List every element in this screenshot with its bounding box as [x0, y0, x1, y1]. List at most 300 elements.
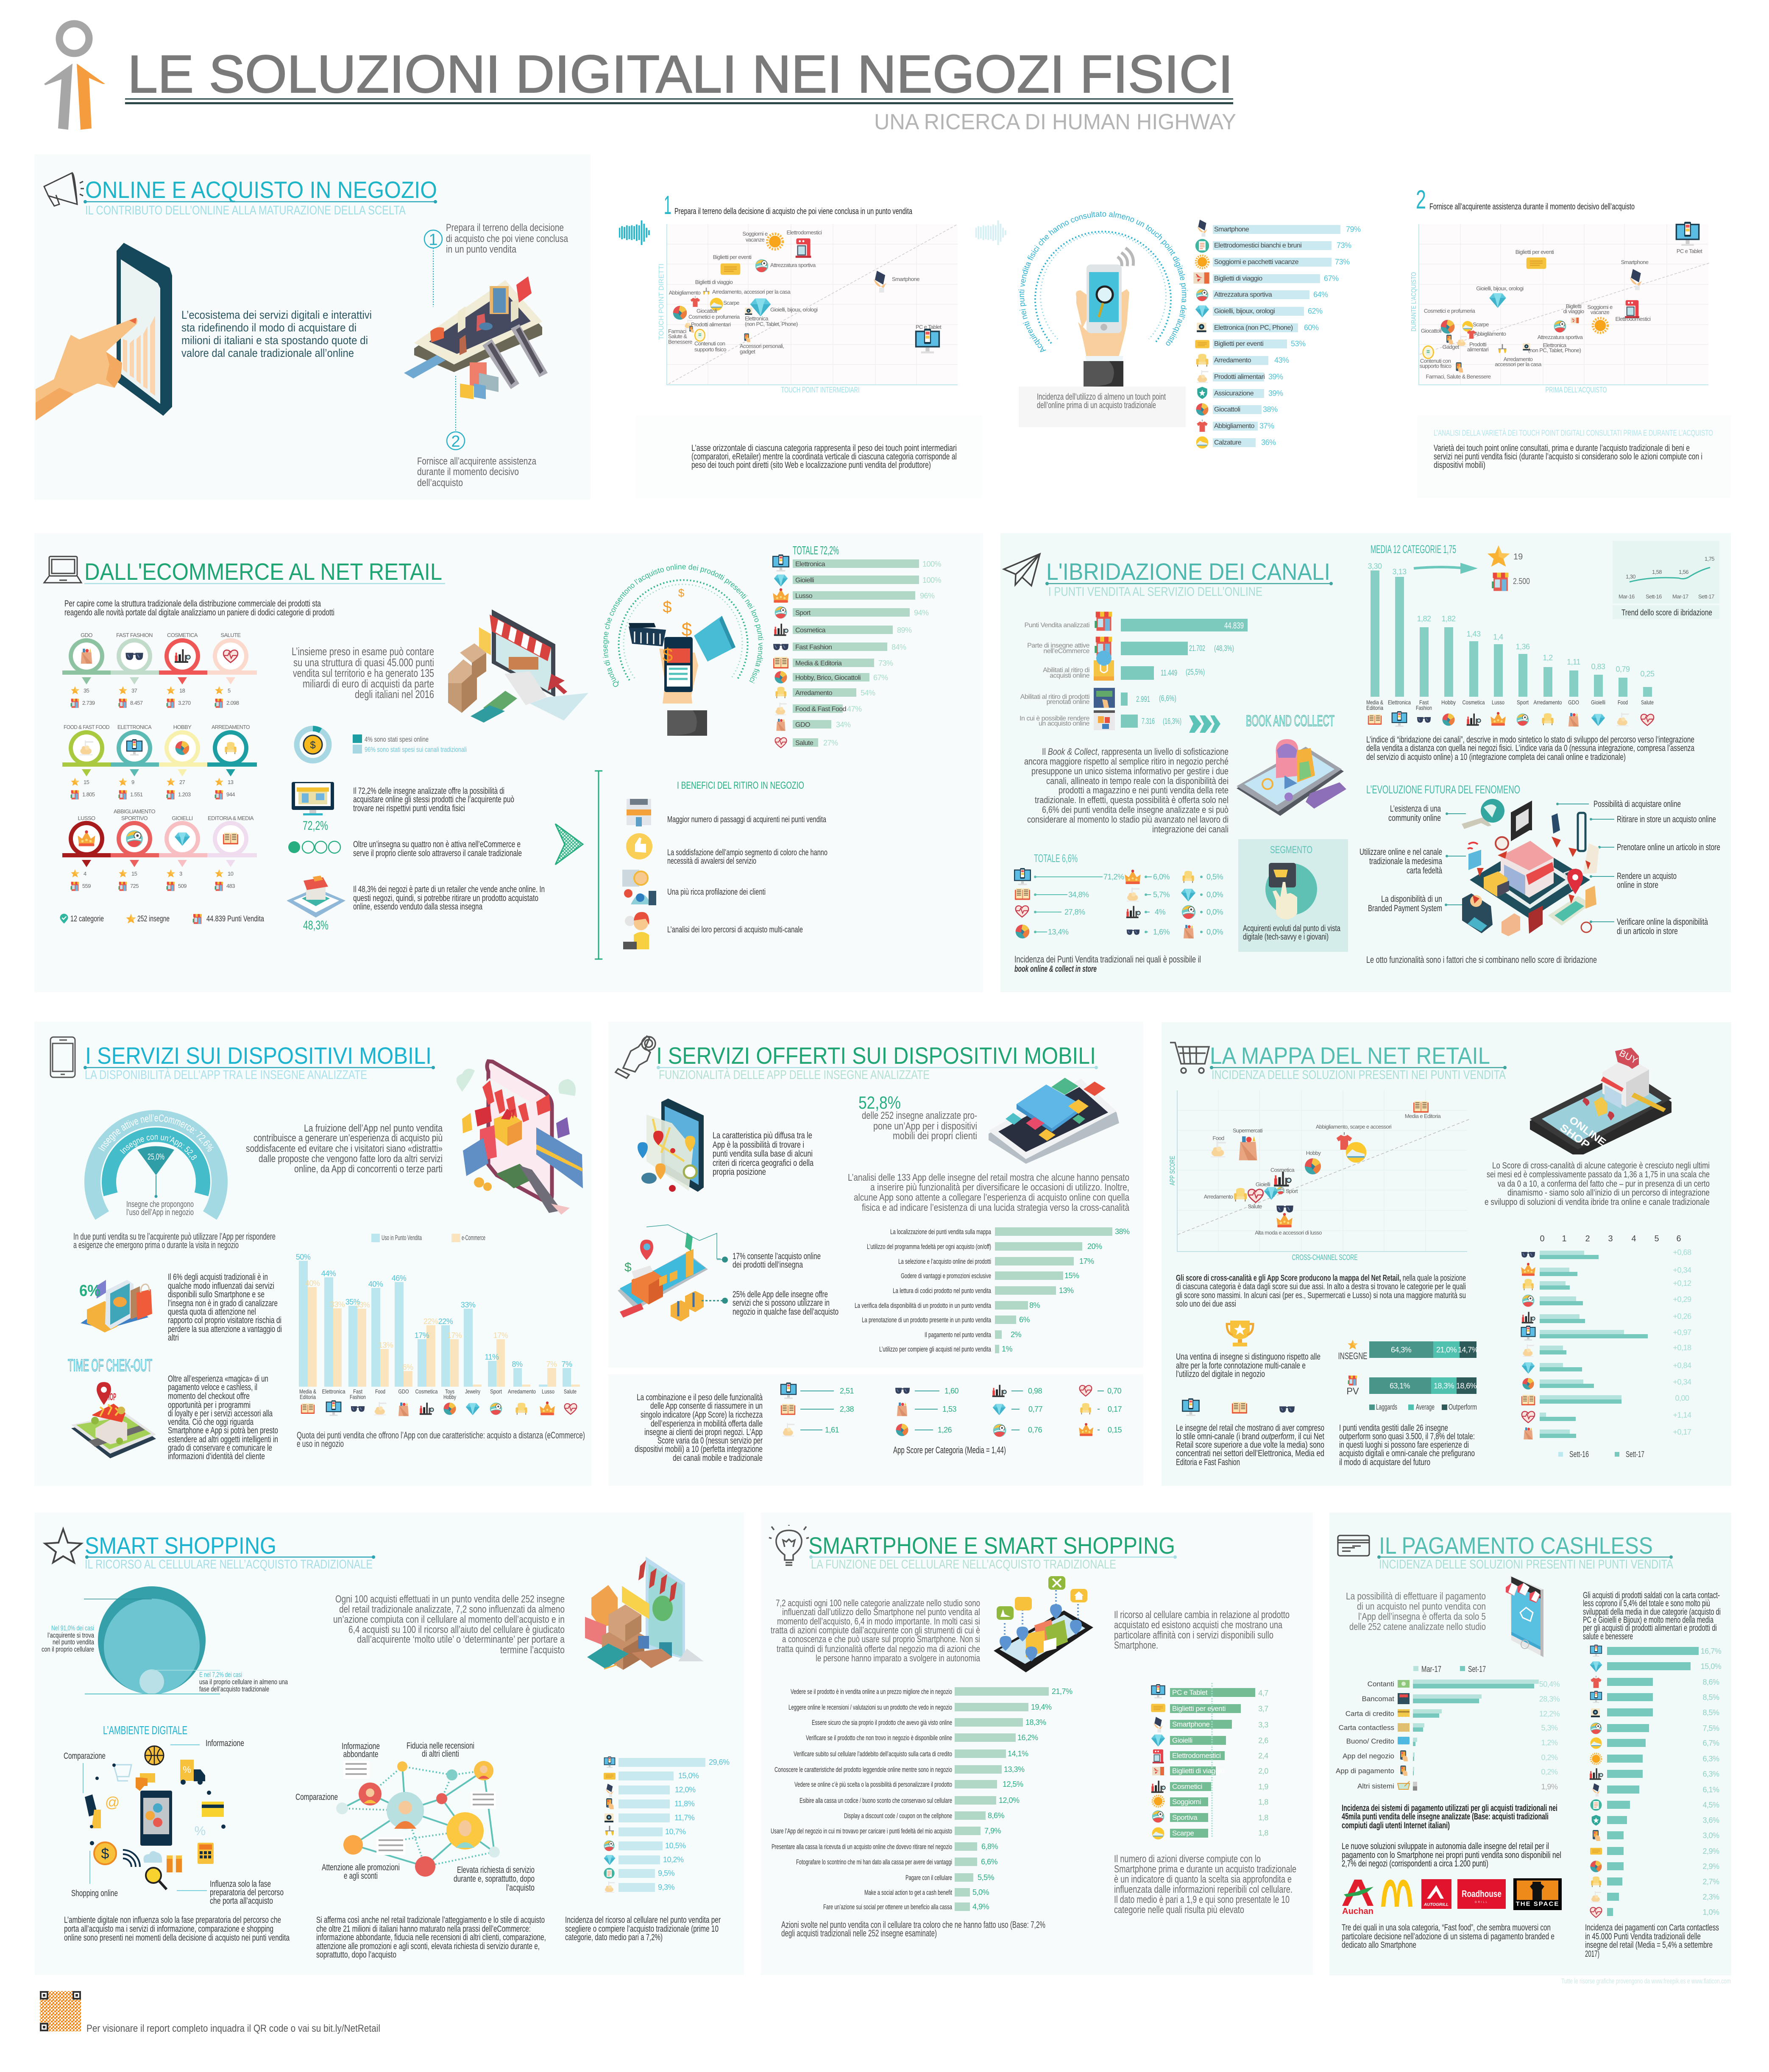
bar chart: sett-16 vs sett-17: 4: [1631, 1234, 1636, 1243]
text: 6% degli acquisti: qualche modo influenzati dai servizi: [168, 1281, 274, 1291]
bar chart: azioni con il cellulare: 12,5%: [1003, 1780, 1023, 1788]
bar chart: azioni per categoria: 1,9: [1258, 1783, 1268, 1791]
stat: 48,3%: questi negozi, quindi, si potrebbe ritirare un prodotto acquistato: [353, 893, 538, 903]
grouped bar chart: app uso e ecommerce: Hobby: [443, 1393, 456, 1400]
nested circles chart: [42, 1586, 288, 1694]
text: carta contactless: per gli acquisti di prodotti alimentari e prodotti di: [1583, 1623, 1717, 1633]
gauge chart: l’uso dell’App in negozio: [126, 1208, 194, 1217]
stat: 48,3%: online, essendo venduto dalla stessa insegna: [353, 902, 482, 912]
column chart: hybrid score: MEDIA 12 CATEGORIE 1,75: [1371, 543, 1456, 556]
chart: app score per categoria: 1,53: [942, 1405, 957, 1413]
chart: app score per categoria: [780, 1382, 1122, 1455]
illustration: hand with phone, basket, bag: $: [663, 645, 673, 665]
scatter chart 2: supporto fisico: [1420, 363, 1451, 369]
bar chart: sett-16 vs sett-17: +0,12: [1673, 1279, 1691, 1288]
bar chart: sett-16 vs sett-17: 1: [1562, 1234, 1567, 1243]
column chart: hybrid score: Media &: [1366, 699, 1384, 706]
stat: 52,8%: [858, 1093, 977, 1142]
trend box: 1,56: [1679, 569, 1688, 575]
bar chart: azioni con il cellulare: 16,2%: [1017, 1733, 1038, 1742]
subheading: LA DISPONIBILITÀ DELL’APP TRA LE INSEGNE ANALIZZATE: [85, 1068, 367, 1082]
text: una ventina: altre per la forte connotazione multi-canale e: [1176, 1361, 1306, 1371]
stat: 48,3%: [287, 876, 545, 932]
box: segmento: Acquirenti evoluti dal punto di vista: [1243, 924, 1341, 933]
text: analysis of touch point variety: Varietà dei touch point online consultati, prima e durante l’acquisto tradizionale di beni e: [1434, 443, 1690, 453]
number 1 and chart title: Prepara il terreno della decisione di acquisto che poi viene conclusa in un punto vendita: [674, 207, 913, 216]
bar chart: funzionalità app: La localizzazione dei punti vendita sulla mappa: [890, 1228, 991, 1236]
bar chart: sett-16 vs sett-17: +0,97: [1673, 1328, 1691, 1337]
text: ogni 100 acquisti: del retail tradizionale analizzate, 7,2 sono influenzati da almeno: [339, 1604, 565, 1615]
grouped bar chart: app uso e ecommerce: 22%: [438, 1317, 453, 1326]
diagram: eight features around store: Ritirare in store un acquisto online: [1617, 815, 1716, 824]
bar chart: touch point by category: Calzature: [1214, 439, 1242, 446]
scatter chart 1: Giocattoli: [696, 308, 717, 314]
scatter chart: net retail map: CROSS-CHANNEL SCORE: [1292, 1253, 1357, 1262]
callout 2: 2: [451, 433, 460, 451]
diagram: eight features around store: community online: [1388, 813, 1441, 823]
bar chart: sett-16 vs sett-17: +0,34: [1673, 1378, 1691, 1386]
subheading: IL CONTRIBUTO DELL’ONLINE ALLA MATURAZIONE DELLA SCELTA: [85, 203, 406, 217]
logos row: Auchan: [1342, 1907, 1373, 1916]
bar chart: totale 72,2%: GDO: [795, 721, 810, 729]
text: 45000 punti vendita: L’insieme preso in esame può contare: [292, 645, 434, 658]
scatter chart: net retail map: Food: [1212, 1135, 1224, 1141]
text: numero di azioni: Il dato medio è pari a 1,9 e qui sono presentate le 10: [1114, 1894, 1290, 1905]
bar chart: carta contactless per categoria: 6,3%: [1702, 1755, 1719, 1763]
bar chart: sett-16 vs sett-17: 2: [1585, 1234, 1590, 1243]
diagram: eight features around store: Branded Payment System: [1368, 904, 1442, 913]
text: numero di azioni: Smartphone prima e durante un acquisto tradizionale: [1114, 1863, 1296, 1875]
chart: totale 6,6% lollipops: 0,0%: [1206, 928, 1223, 936]
icon: qr code: [40, 1991, 81, 2031]
bar chart: funzionalità app: La lettura di codici prodotto nel punto vendita: [893, 1287, 991, 1295]
funnel bars: punti vendita: (25,5%): [1186, 668, 1205, 677]
grouped bar chart: app uso e ecommerce: 13%: [379, 1341, 393, 1349]
chart: totale 6,6% lollipops: 34,8%: [1068, 890, 1089, 899]
bar chart: sett-16 vs sett-17: +0,26: [1673, 1312, 1691, 1321]
text: map explanation: di ciascuna categoria è data dagli score sui due assi. In alto a destra si trovano le categorie per le quali: [1176, 1282, 1466, 1291]
bar chart: ricorso al cellulare: 10,7%: [665, 1827, 686, 1836]
stat: 48,3%: 48,3%: [303, 918, 329, 932]
bar chart: azioni con il cellulare: 5,5%: [978, 1873, 995, 1882]
icon: laptop: [44, 556, 81, 583]
chart: app score per categoria: 2,38: [840, 1405, 854, 1413]
column chart: hybrid score: 1,4: [1493, 633, 1503, 641]
diagram: eight features around store: L’esistenza di una: [1390, 804, 1441, 814]
bar chart: funzionalità app: L’utilizzo per compiere gli acquisti nel punto vendita: [879, 1345, 991, 1353]
bar chart: ricorso al cellulare: [604, 1757, 730, 1893]
heading: SMARTPHONE E SMART SHOPPING: [808, 1532, 1175, 1559]
diagram: digital environment icons: @: [105, 1794, 120, 1811]
text: book & collect: [1024, 746, 1229, 834]
diagram: social network: di altri clienti: [422, 1749, 459, 1759]
grouped bar chart: app uso e ecommerce: Elettronica: [322, 1388, 345, 1395]
text: book & collect: 6,6% dei punti vendita delle insegne analizzate e si può: [1042, 804, 1229, 815]
illustration: store on phone with gifts: $: [624, 1260, 632, 1274]
text: app score: [635, 1393, 763, 1463]
text: due punti vendita su tre: [73, 1231, 276, 1250]
category pins row 3: 3: [179, 871, 182, 877]
text: caratteristica più diffusa: criteri di ricerca geografici o della: [713, 1158, 813, 1168]
bar chart: touch point by category: Biglietti per eventi: [1214, 340, 1263, 348]
chart: app score per categoria: App Score per Categoria (Media = 1,44): [893, 1445, 1006, 1455]
text: intro: Per capire come la struttura tradizionale della distribuzione commerciale dei prodotti sta: [64, 599, 321, 609]
text: incidenza dei sistemi: Le nuove soluzioni sviluppate in autonomia dalle insegne del retail per il: [1342, 1841, 1549, 1851]
heading: I SERVIZI OFFERTI SUI DISPOSITIVI MOBILI: [656, 1042, 1096, 1069]
bar chart: azioni con il cellulare: 18,3%: [1025, 1718, 1046, 1727]
text: 7,2 acquisti ogni 100: tratta di azioni compiute dall’acquirente con gli strumenti di cui è: [771, 1625, 980, 1635]
bar chart: azioni per categoria: Elettrodomestici: [1172, 1752, 1221, 1760]
panel: l'ibridazione dei canali: [1000, 533, 1731, 992]
text: fruizione dell'app: La fruizione dell’App nel punto vendita: [304, 1123, 443, 1134]
illustration: store with boxes: [585, 1557, 704, 1670]
text: analisi 133 app: fisica e ad indicare l’esistenza di una lucida strategia verso la cross-canalità: [862, 1202, 1129, 1213]
bar chart: azioni per categoria: 1,8: [1258, 1798, 1268, 1806]
heading: SMART SHOPPING: [85, 1532, 276, 1559]
category pins row 2: FOOD & FAST FOOD: [64, 724, 109, 730]
scatter chart 2: Biglietti: [1566, 303, 1582, 309]
header: logo and title: [44, 24, 1236, 134]
text: analisi 133 app: [848, 1172, 1129, 1213]
scatter chart: net retail map: Abbigliamento, scarpe e accessori: [1316, 1124, 1392, 1130]
trend box: Mar-16: [1619, 593, 1635, 600]
column chart: hybrid score: Sport: [1517, 699, 1529, 706]
trend box: [1613, 541, 1719, 619]
grouped bar chart: app uso e ecommerce: 17%: [493, 1331, 508, 1340]
text: 45000 punti vendita: vendita sul territorio e ha generato 135: [293, 667, 434, 679]
bar chart: totale 72,2%: 27%: [823, 739, 838, 747]
bar chart: sistemi di pagamento: Contanti: [1368, 1680, 1394, 1688]
scatter chart 1: Soggiorni e: [742, 231, 768, 237]
text: book & collect: ancora maggiore rispetto al semplice ritiro in negozio perché: [1024, 756, 1229, 767]
bar chart: ricorso al cellulare: 11,8%: [674, 1799, 695, 1808]
text: 17% and 25%: servizi che si possono utilizzare in: [733, 1298, 830, 1308]
chart: app score per categoria: 1,61: [825, 1426, 839, 1434]
text: analisi 133 app: alcune App sono attente a collegare l’esperienza di acquisto online con quella: [854, 1192, 1129, 1203]
panel: chart 1 prepara il terreno: [619, 191, 982, 498]
stat: 72,2%: trovare nei rispettivi punti vendita fisici: [353, 804, 465, 813]
ring with curved text: Acquirenti nei punti vendita fisici che hanno consultato almeno un touch point digitale prima dell’acquisto: [1017, 210, 1189, 355]
bar chart: funzionalità app: 38%: [1115, 1227, 1130, 1236]
text: ogni 100 acquisti: 6,4 acquisti su 100 il ricorso all’aiuto del cellulare è giudicato: [348, 1624, 565, 1635]
stacked bars: insegne and pv: PV: [1346, 1386, 1359, 1396]
text: 7,2 acquisti ogni 100: 7,2 acquisti ogni 100 nelle categorie analizzate nello studio sono: [776, 1598, 980, 1608]
chart: totale 6,6% lollipops: TOTALE 6,6%: [1034, 852, 1078, 865]
category pins row 2: 1.805: [82, 791, 95, 798]
text: three captions: Si afferma così anche nel retail tradizionale l’atteggiamento e lo stile di acquisto: [316, 1915, 545, 1925]
bar chart: azioni per categoria: 3,3: [1258, 1721, 1268, 1729]
bar chart: ricorso al cellulare: 10,2%: [663, 1855, 684, 1864]
category pins row 2: 1.203: [178, 791, 191, 798]
text: 6% degli acquisti: questa quota di attenzione nel: [168, 1307, 256, 1317]
category pins row 1: 8.457: [130, 700, 143, 706]
column chart: hybrid score: Fast: [1419, 699, 1429, 706]
bar chart: sett-16 vs sett-17: +0,68: [1673, 1248, 1691, 1257]
text: book & collect: Il Book & Collect, rappresenta un livello di sofisticazione: [1042, 746, 1229, 757]
panel: dall'ecommerce al net retail: [34, 533, 983, 992]
column chart: hybrid score: Editoria: [1366, 704, 1383, 711]
chart: totale 6,6% lollipops: 0,5%: [1206, 873, 1223, 881]
text: three captions: Incidenza del ricorso al cellulare nel punto vendita per: [565, 1915, 721, 1925]
illustration: hand holding phone: [1076, 248, 1134, 387]
text: map explanation: solo uno dei due assi: [1176, 1299, 1236, 1309]
column chart: hybrid score: 0,79: [1616, 665, 1630, 673]
number 1 and chart title: 1: [664, 191, 671, 220]
bar chart: azioni con il cellulare: Leggere online le recensioni / valutazioni su un prodotto che vedo in negozio: [788, 1703, 952, 1711]
column chart: hybrid score: 1,2: [1543, 654, 1553, 662]
illustration: book and collect phone: [1237, 739, 1346, 816]
category pins row 2: 9: [131, 779, 134, 785]
category pins row 1: GDO: [81, 632, 92, 638]
icon: smartphone outline: [50, 1037, 75, 1077]
bar chart: sistemi di pagamento: 1,9%: [1541, 1783, 1558, 1791]
text: book & collect: canali, allineato in tempo reale con la disponibilità dei: [1046, 776, 1229, 786]
grouped bar chart: app uso e ecommerce: 33%: [330, 1300, 345, 1309]
bar chart: carta contactless per categoria: 2,7%: [1702, 1877, 1719, 1886]
bar chart: totale 72,2%: 84%: [891, 643, 906, 651]
bar chart: sett-16 vs sett-17: 0,00: [1675, 1394, 1689, 1402]
illustration: online shop tablet: [1530, 1048, 1671, 1154]
category pins row 2: HOBBY: [173, 724, 192, 730]
text: due punti vendita su tre: a esigenze che emergono prima o durante la visita in negozio: [73, 1240, 239, 1250]
bar chart: funzionalità app: 17%: [1079, 1257, 1094, 1265]
bar chart: funzionalità app: La prenotazione di un prodotto presente in un punto vendita: [862, 1316, 991, 1324]
chart: app score per categoria: 0,98: [1028, 1387, 1042, 1395]
bar chart: touch point by category: 73%: [1335, 258, 1350, 266]
arrow: mesh chevron: [555, 824, 583, 865]
chart: totale 6,6% lollipops: 27,8%: [1064, 908, 1085, 916]
benefits list: [622, 780, 827, 949]
column chart: hybrid score: 3,13: [1392, 567, 1407, 576]
bar chart: azioni con il cellulare: 7,9%: [984, 1827, 1001, 1835]
bar chart: touch point by category: Biglietti di viaggio: [1214, 275, 1262, 282]
summary totals: 44.839 Punti Vendita: [206, 915, 264, 923]
grouped bar chart: app uso e ecommerce: 6%: [402, 1363, 413, 1371]
bar chart: ricorso al cellulare: 11,7%: [674, 1813, 695, 1822]
category pins row 3: GIOIELLI: [172, 815, 193, 821]
text: analisi 133 app: a inserire più funzionalità per diversificare le occasioni di utilizzo. Inoltre,: [870, 1182, 1129, 1193]
scatter chart 2: Elettronica: [1543, 342, 1567, 348]
bar chart: funzionalità app: 20%: [1087, 1242, 1102, 1251]
bar chart: azioni con il cellulare: 13,3%: [1004, 1765, 1025, 1774]
text: carta contactless: PC e Gioielli e Bijoux) e molto meno della media: [1583, 1615, 1713, 1625]
diagram: eight features around store: online in store: [1617, 880, 1658, 890]
bar chart: carta contactless per categoria: 3,6%: [1702, 1816, 1719, 1824]
text: check-out: opportunità per i programmi: [168, 1400, 251, 1410]
bar chart: totale 72,2%: 73%: [878, 659, 893, 667]
bar chart: funzionalità app: 6%: [1019, 1316, 1030, 1324]
text: ecosystem: [181, 309, 372, 359]
text: tre dei quali: dedicato allo Smartphone: [1342, 1940, 1416, 1950]
diagram: digital environment icons: $: [101, 1846, 109, 1862]
illustration: hand with phone, basket, bag: $: [678, 587, 685, 599]
funnel bars: punti vendita: Abilitati al ritiro di: [1043, 667, 1089, 674]
category pins row 3: 4: [84, 871, 86, 877]
text: carta contactless: [1583, 1591, 1721, 1641]
panel: i servizi sui dispositivi mobili: [0, 0, 591, 1486]
panel: la mappa del net retail: [1162, 1022, 1731, 1486]
stat: one in four circles: serve il proprio cliente solo attraverso il canale tradizionale: [353, 848, 522, 858]
box: segmento: digitale (tech-savvy e i giovani): [1243, 932, 1329, 942]
bar chart: funzionalità app: L’utilizzo del programma fedeltà per ogni acquisto (on/off): [867, 1243, 991, 1251]
scatter chart 2: Soggiorni e: [1587, 304, 1613, 310]
bar chart: carta contactless per categoria: 2,9%: [1702, 1847, 1719, 1855]
text: ogni 100 acquisti: termine l’acquisto: [500, 1644, 565, 1656]
column chart: hybrid score: 1,11: [1567, 658, 1580, 666]
bar chart: ricorso al cellulare: 9,5%: [658, 1869, 675, 1877]
funnel bars: punti vendita: acquisti online: [1050, 672, 1090, 679]
text: book & collect: tradizionale. In effetti, questa possibilità è offerta solo nel: [1035, 795, 1229, 805]
chart: totale 6,6% lollipops: 13,4%: [1048, 928, 1069, 936]
panel: chart 2 assistenza: [1410, 185, 1731, 498]
diagram: social network: Comparazione: [295, 1792, 338, 1802]
illustration: online shop tablet: SHOP: [1557, 1122, 1592, 1151]
bar chart: touch point by category: 43%: [1274, 356, 1289, 364]
bar chart: sistemi di pagamento: [1336, 1665, 1560, 1791]
bar chart: azioni con il cellulare: 6,8%: [981, 1842, 998, 1851]
bar chart: azioni con il cellulare: Presentare alla cassa la ricevuta di un acquisto online che dovevo ritirare nel negozio: [772, 1843, 952, 1851]
chart: totale 6,6% lollipops: 0,0%: [1206, 890, 1223, 899]
diagram: digital environment icons: Shopping online: [71, 1888, 118, 1898]
bar chart: sistemi di pagamento: 0,2%: [1541, 1753, 1558, 1762]
scatter chart 1: Elettronica: [745, 315, 769, 322]
panel: touch point ring and bars: [976, 210, 1361, 448]
callout 2: dell’acquisto: [417, 477, 463, 489]
funnel bars: punti vendita: 21.702: [1189, 644, 1205, 653]
bar chart: azioni con il cellulare: Esibire alla cassa un codice / buono sconto che conservavo sul cellulare: [800, 1797, 952, 1805]
diagram: digital environment icons: %: [195, 1824, 206, 1838]
stat: 72,2%: Il 72,2% delle insegne analizzate offre la possibilità di: [353, 786, 504, 796]
text: 7,2 acquisti ogni 100: tratta quindi di funzionalità offerte dal negozio ma di azioni che: [777, 1644, 980, 1654]
bar chart: funzionalità app: La selezione e l’acquisto online dei prodotti: [898, 1257, 991, 1265]
bar chart: totale 72,2%: Food & Fast Food: [795, 706, 846, 713]
scatter chart 2: Gioielli, bijoux, orologi: [1476, 285, 1524, 292]
diagram: eight features around store: tradizionale la medesima: [1369, 857, 1442, 866]
bar chart: azioni con il cellulare: Fotografare lo scontrino che mi han dato alla cassa per avere dei vantaggi: [796, 1858, 952, 1866]
text: cross-canalità: va da 0 a 10, a conferma del fatto che – pur in presenza di un certo: [1498, 1179, 1710, 1189]
subheading: I PUNTI VENDITA AL SERVIZIO DELL’ONLINE: [1048, 585, 1262, 599]
text: 17% and 25%: negozio in qualche fase dell’acquisto: [733, 1307, 839, 1317]
text: check-out: vendita. Ciò che oggi riguarda: [168, 1417, 254, 1427]
text: 17% and 25%: dei prodotti dell’insegna: [733, 1260, 803, 1270]
column chart: hybrid score: 0,25: [1640, 670, 1655, 678]
donut: online share: 96% sono stati spesi sui canali tradizionali: [365, 745, 467, 754]
grouped bar chart: app uso e ecommerce: Quota dei punti vendita che offrono l’App con due caratteristiche: acquisto a distanza (eCommerce): [297, 1430, 585, 1441]
column chart: hybrid score: 19: [1513, 552, 1523, 562]
text: app score: La combinazione e il peso delle funzionalità: [637, 1393, 763, 1402]
category pins row 2: 13: [228, 779, 234, 785]
panel: online e acquisto in negozio: [34, 154, 591, 500]
diagram: digital environment icons: Influenza solo la fase: [210, 1879, 271, 1889]
text: punti vendita outperform: acquisto digitali e omni-canale che prefigurano: [1339, 1449, 1475, 1458]
column chart: hybrid score: 0,83: [1591, 662, 1605, 671]
bar chart: totale 72,2%: Cosmetica: [795, 627, 826, 634]
text: app score: singolo indicatore (App Score) la ricchezza: [641, 1410, 763, 1420]
category pins row 3: 10: [228, 871, 234, 877]
bar chart: sett-16 vs sett-17: +0,18: [1673, 1343, 1691, 1352]
bar chart: touch point by category: 73%: [1337, 241, 1351, 250]
category pins row 1: COSMETICA: [167, 632, 198, 638]
scatter chart 2: alimentari: [1467, 346, 1489, 353]
diagram: social network: durante e, soprattutto, dopo: [454, 1874, 535, 1884]
grouped bar chart: app uso e ecommerce: [296, 1234, 585, 1449]
box: segmento: [1238, 839, 1348, 952]
bar chart: sistemi di pagamento: Carta di credito: [1346, 1710, 1394, 1718]
bar chart: azioni per categoria: 3,7: [1258, 1705, 1268, 1713]
bar chart: totale 72,2%: Fast Fashion: [795, 644, 832, 651]
scatter chart 1: Benessere: [668, 339, 692, 345]
funnel bars: punti vendita: (6,6%): [1159, 694, 1176, 703]
text: numero di azioni: categorie nelle quali risulta più elevato: [1114, 1904, 1244, 1916]
bar chart: touch point by category: Prodotti alimentari: [1214, 373, 1265, 381]
heading: I SERVIZI SUI DISPOSITIVI MOBILI: [85, 1042, 432, 1069]
number 1 and chart title: [664, 191, 913, 220]
funnel bars: punti vendita: 11.449: [1161, 669, 1177, 678]
text: book & collect: considerare al momento lo stadio più avanzato nel lavoro di: [1027, 814, 1229, 825]
text: 45000 punti vendita: degli italiani nel 2016: [355, 688, 434, 701]
illustration: store on phone: SHOP: [103, 1391, 116, 1403]
gauge chart: Insegne attive nell’eCommerce: 72,6%: [96, 1112, 216, 1154]
text: caratteristica più diffusa: [713, 1131, 813, 1177]
diagram: eight features around store: carta fedeltà: [1407, 866, 1442, 876]
illustration: smartphone with hand: [36, 243, 172, 420]
text box: touch point note: Incidenza dell’utilizzo di almeno un touch point: [1037, 392, 1166, 402]
diagram: social network: Elevata richiesta di servizio: [457, 1865, 535, 1875]
stacked bars: insegne and pv: 18,3%: [1434, 1382, 1454, 1390]
scatter chart: net retail map: Supermercati: [1233, 1127, 1263, 1134]
text: ricorso al cellulare: particolare affinità con i servizi disponibili sullo: [1114, 1630, 1273, 1641]
text: ecosystem: L’ecosistema dei servizi digitali e interattivi: [181, 309, 372, 321]
bar chart: touch point by category: Smartphone: [1214, 226, 1249, 233]
text: omni-canale: Editoria e Fast Fashion: [1176, 1457, 1240, 1467]
chart: app score per categoria: 0,70: [1107, 1387, 1122, 1395]
scatter chart: net retail map: Gioielli: [1256, 1181, 1270, 1188]
icons: outperform sectors: [1182, 1399, 1295, 1416]
callout 1: 1: [429, 231, 438, 249]
bar chart: azioni con il cellulare: Vedere se online c’è più scelta o la possibilità di personalizzare il prodotto: [794, 1780, 952, 1788]
text: check-out: pagamento veloce e cashless, il: [168, 1382, 257, 1392]
category pins row 1: 18: [179, 687, 185, 694]
grouped bar chart: app uso e ecommerce: Sport: [490, 1388, 502, 1395]
text: check-out: momento del checkout offre: [168, 1391, 250, 1401]
scatter chart 2: Giocattoli: [1421, 328, 1442, 334]
scatter chart: net retail map: Sport: [1286, 1188, 1298, 1194]
bar chart: totale 72,2%: 100%: [922, 576, 942, 584]
scatter chart 2: Attrezzatura sportiva: [1538, 334, 1583, 340]
scatter chart 2: (non PC, Tablet, Phone): [1528, 347, 1581, 353]
scatter chart: net retail map: Salute: [1248, 1203, 1262, 1210]
text: incidenza dei sistemi: pagamento con lo Smartphone nei propri punti vendita sono disponibili nel: [1342, 1850, 1561, 1860]
stat: 52,8%: pone un’App per i dispositivi: [873, 1121, 977, 1132]
column chart: hybrid score: Elettronica: [1388, 699, 1411, 706]
grouped bar chart: app uso e ecommerce: 17%: [447, 1331, 462, 1340]
bar chart: sistemi di pagamento: 5,3%: [1541, 1724, 1558, 1732]
bar chart: azioni con il cellulare: 12,0%: [999, 1796, 1020, 1805]
illustration: phone with gifts: [457, 1061, 583, 1215]
diagram: eight features around store: [1359, 799, 1720, 936]
text: map explanation: Gli score di cross-canalità e gli App Score producono la mappa del Net Retail, nella quale la posizione: [1176, 1274, 1466, 1283]
grouped bar chart: app uso e ecommerce: GDO: [398, 1388, 409, 1395]
bar chart: azioni per categoria: 4,7: [1258, 1689, 1268, 1697]
bar chart: sett-16 vs sett-17: 5: [1654, 1234, 1659, 1243]
text: analisi 133 app: L’analisi delle 133 App delle insegne del retail mostra che alcune hanno pensato: [848, 1172, 1129, 1183]
bar chart: totale 72,2%: Gioielli: [795, 577, 814, 584]
column chart: hybrid score: 1,36: [1515, 642, 1530, 651]
text: incidenza dei sistemi: Incidenza dei sistemi di pagamento utilizzati per gli acquisti tradizionali nei: [1342, 1803, 1557, 1813]
chevrons arrow: [1189, 715, 1220, 733]
scatter chart 1: PC e Tablet: [916, 324, 942, 330]
stacked bars: insegne and pv: INSEGNE: [1338, 1351, 1368, 1361]
